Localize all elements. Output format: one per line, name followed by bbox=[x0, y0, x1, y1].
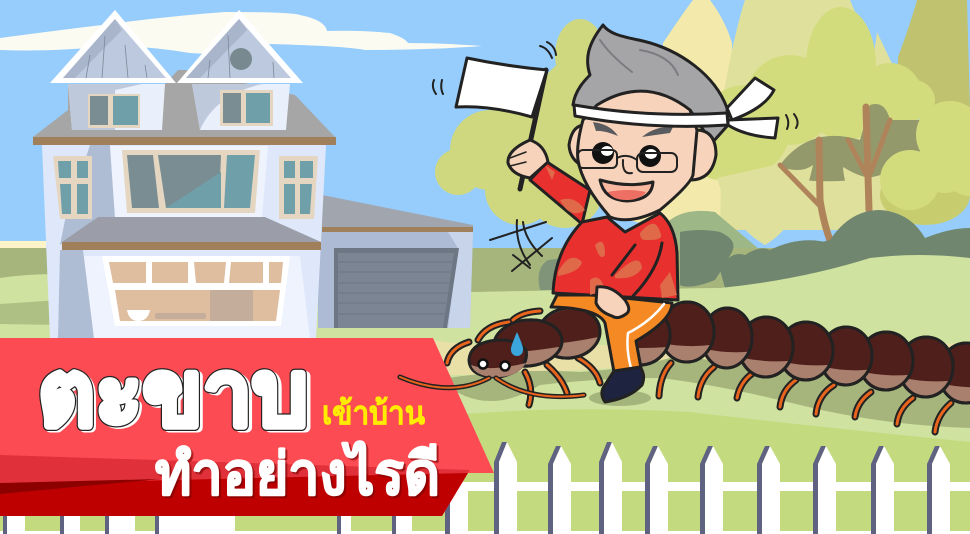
headband bbox=[574, 105, 728, 126]
ground path and shadow bbox=[0, 338, 970, 534]
headband tails bbox=[727, 78, 774, 120]
shirt pattern bbox=[545, 165, 677, 298]
title: what to do: ทำอย่างไรดี bbox=[155, 441, 440, 507]
house bbox=[33, 10, 473, 338]
trousers bbox=[551, 295, 672, 372]
garage door bbox=[334, 248, 459, 328]
eyes bbox=[592, 142, 661, 167]
shirt bbox=[553, 213, 678, 300]
ears bbox=[569, 125, 585, 166]
shoe shadow bbox=[589, 390, 651, 406]
flag bbox=[456, 58, 547, 117]
title: centipede: ตะขาบ bbox=[38, 343, 308, 445]
trouser stripe bbox=[627, 304, 664, 368]
shoe bbox=[602, 367, 644, 402]
title: centipede: ตะขาบ bbox=[38, 343, 308, 445]
centipede head bbox=[469, 340, 526, 377]
banner bbox=[0, 338, 494, 516]
glasses bbox=[578, 150, 677, 173]
picket fence bbox=[0, 442, 970, 534]
man on centipede bbox=[433, 25, 798, 406]
title: centipede: ตะขาบ bbox=[40, 345, 312, 447]
motion marks bbox=[433, 42, 798, 129]
body segments bbox=[492, 301, 970, 405]
flag pole bbox=[520, 70, 546, 189]
raised hand bbox=[508, 140, 548, 178]
face bbox=[578, 91, 697, 220]
title: what to do: ทำอย่างไรดี bbox=[157, 443, 442, 509]
centipede bbox=[447, 301, 970, 432]
centipede antenna over banner bbox=[400, 377, 584, 397]
cobweb bbox=[490, 220, 552, 271]
cloud bbox=[0, 12, 482, 54]
eyebrows bbox=[593, 122, 673, 137]
sweat drop bbox=[511, 332, 523, 356]
mouth bbox=[600, 180, 653, 201]
thigh hand bbox=[596, 287, 629, 318]
legs bbox=[447, 311, 951, 432]
hair bbox=[573, 25, 728, 143]
subtitle: enters the house: เข้าบ้าน bbox=[322, 395, 425, 431]
arm bbox=[530, 162, 590, 224]
